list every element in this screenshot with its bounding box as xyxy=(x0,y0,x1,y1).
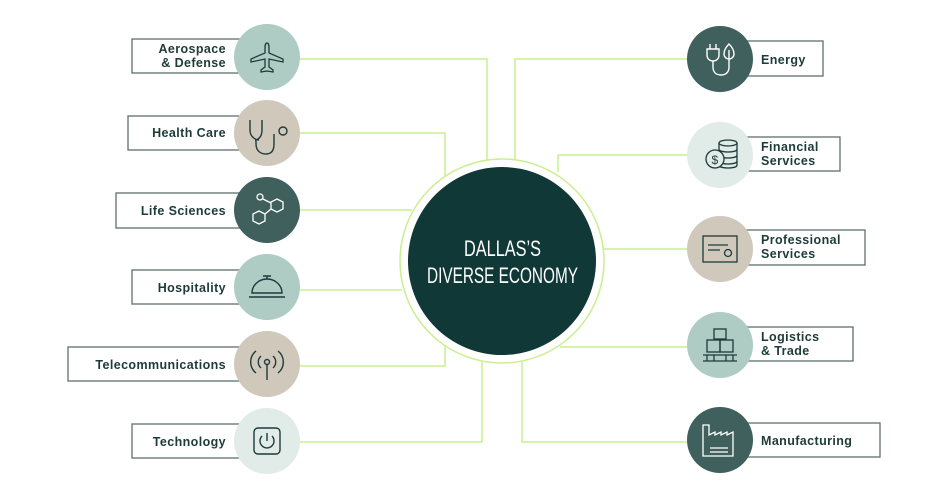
label: Financial Services: Financial xyxy=(761,140,819,154)
label: Financial Services: Services xyxy=(761,154,816,168)
center hub: DIVERSE ECONOMY xyxy=(427,263,578,288)
label: Technology: Technology xyxy=(153,435,226,449)
label: Professional Services: Services xyxy=(761,247,816,261)
label: Energy: Energy xyxy=(761,53,806,67)
label: Energy xyxy=(743,41,823,76)
icon: stethoscope xyxy=(234,100,300,166)
icon: boxes xyxy=(687,312,753,378)
label: Logistics & Trade xyxy=(743,327,853,361)
icon: antenna xyxy=(234,331,300,397)
label: Aerospace & Defense xyxy=(132,39,242,73)
label: Health Care xyxy=(128,116,242,150)
label: Professional Services: Professional xyxy=(761,233,841,247)
icon: molecule xyxy=(234,177,300,243)
icon: coins xyxy=(687,122,753,188)
icon: coins: $ xyxy=(711,153,719,167)
label: Telecommunications: Telecommunications xyxy=(95,358,226,372)
icon: service bell xyxy=(234,254,300,320)
icon: plug and leaf xyxy=(687,26,753,92)
icon: factory xyxy=(687,407,753,473)
label: Financial Services xyxy=(743,137,840,171)
label: Aerospace & Defense: Aerospace xyxy=(158,42,226,56)
title: DALLAS’S xyxy=(464,236,541,261)
icon: certificate xyxy=(687,216,753,282)
label: Hospitality: Hospitality xyxy=(158,281,226,295)
label: Logistics & Trade: Logistics xyxy=(761,330,819,344)
label: Manufacturing: Manufacturing xyxy=(761,434,852,448)
label: Life Sciences: Life Sciences xyxy=(141,204,226,218)
label: Manufacturing xyxy=(743,423,880,457)
label: Telecommunications xyxy=(68,347,242,381)
label: Health Care: Health Care xyxy=(152,126,226,140)
label: Life Sciences xyxy=(116,193,242,228)
label: Aerospace & Defense: & Defense xyxy=(161,56,226,70)
label: Hospitality xyxy=(132,270,242,304)
label: Logistics & Trade: & Trade xyxy=(761,344,810,358)
icon: airplane xyxy=(234,24,300,90)
icon: power button xyxy=(234,408,300,474)
label: Professional Services xyxy=(743,230,865,265)
center hub xyxy=(400,159,604,363)
label: Technology xyxy=(132,424,242,458)
